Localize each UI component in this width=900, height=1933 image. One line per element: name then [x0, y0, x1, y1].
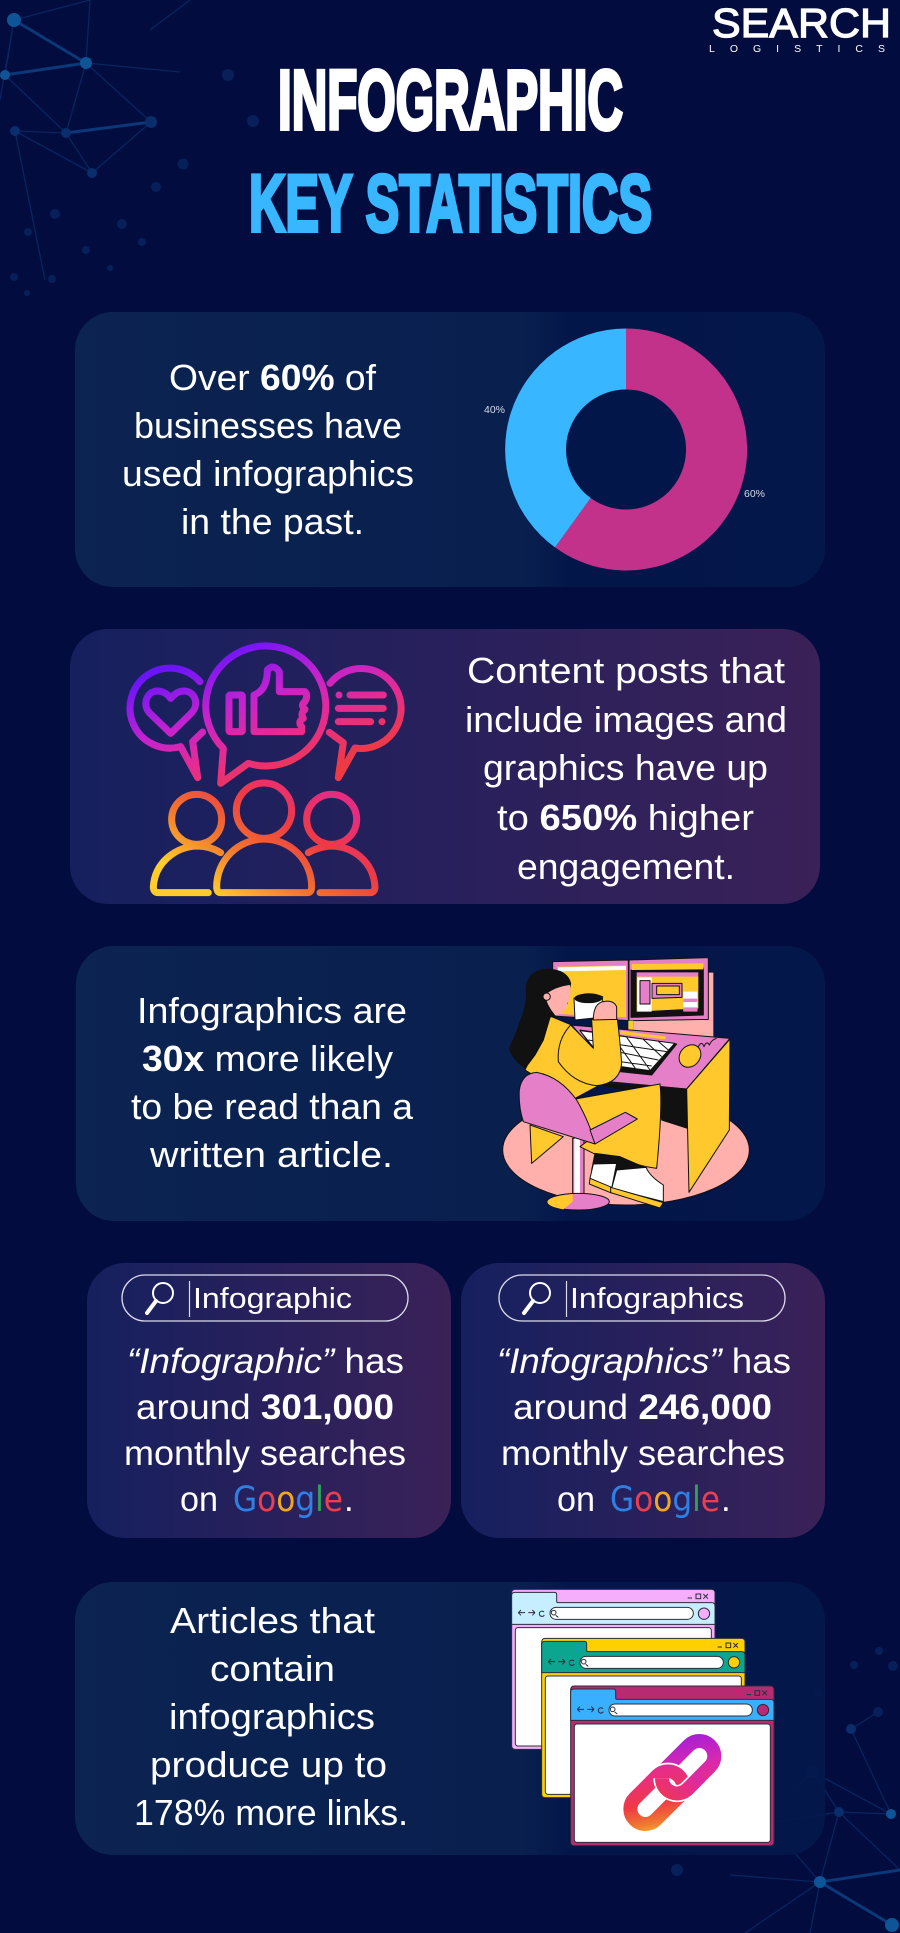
title: [249, 53, 652, 249]
icon: people with reaction speech bubbles: [130, 646, 401, 893]
stat text: over 60%: used infographics: [122, 453, 414, 494]
search bar: [499, 1275, 785, 1321]
stat text: Infographic searches: on: [180, 1480, 218, 1519]
stat text: links: Articles that: [170, 1600, 375, 1641]
stat text: 650% engagement: graphics have up: [483, 747, 768, 788]
browser window: pink: [512, 1589, 715, 1749]
search bar: [122, 1275, 408, 1321]
stat text: Infographics searches: Google: [610, 1480, 720, 1520]
stat text: Infographics searches: [497, 1342, 791, 1520]
panel: 60% of businesses: [75, 312, 825, 587]
title: INFOGRAPHIC: [278, 53, 623, 147]
stat text: links: [134, 1600, 408, 1833]
background network: bottom right: [671, 1647, 900, 1933]
stat text: over 60%: businesses have: [134, 405, 402, 446]
stat text: Infographic searches: around 301,000: [136, 1388, 394, 1427]
stat text: 30x: 30x more likely: [142, 1038, 393, 1079]
panel: 178% more links: [75, 1582, 825, 1855]
browser window: magenta and blue: [571, 1686, 774, 1846]
donut chart: [484, 328, 765, 570]
icon: magnifier: [524, 1283, 550, 1313]
stat text: links: contain: [210, 1648, 335, 1689]
title: KEY STATISTICS: [249, 159, 652, 249]
logo: SEARCH: [712, 0, 891, 46]
stat text: links: infographics: [169, 1696, 375, 1737]
panel: Infographics searches: [461, 1263, 825, 1538]
stat text: 650% engagement: Content posts that: [467, 650, 785, 691]
stat text: Infographic searches: [124, 1342, 406, 1520]
stat text: Infographic searches: “Infographic” has: [127, 1342, 404, 1381]
stat text: links: 178% more links.: [134, 1792, 408, 1833]
icon: chain link: [624, 1735, 721, 1830]
stat text: 650% engagement: to 650% higher: [497, 797, 754, 838]
panel: 30x more likely: [76, 946, 825, 1221]
stat text: 30x: [131, 990, 414, 1175]
stat text: 30x: written article.: [149, 1134, 393, 1175]
stat text: Infographics searches: on: [557, 1480, 595, 1519]
stat text: 650% engagement: [465, 650, 787, 887]
stat text: Infographic searches: .: [344, 1480, 354, 1519]
stat text: Infographics searches: .: [721, 1480, 731, 1519]
illustration: stacked browser windows with link: [512, 1589, 774, 1846]
stat text: Infographic searches: monthly searches: [124, 1434, 406, 1473]
icon: magnifier: [147, 1283, 173, 1313]
illustration: woman at desk: [503, 958, 749, 1210]
search bar: Infographics: [570, 1283, 744, 1315]
stat text: Infographics searches: around 246,000: [513, 1388, 772, 1427]
stat text: 30x: Infographics are: [137, 990, 407, 1031]
stat text: Infographics searches: “Infographics” has: [497, 1342, 791, 1381]
stat text: over 60%: [122, 357, 414, 542]
stat text: 650% engagement: include images and: [465, 699, 787, 740]
panel: Infographic searches: [87, 1263, 451, 1538]
stat text: Infographic searches: Google: [233, 1480, 343, 1520]
panel: 650% engagement: [70, 629, 820, 904]
stat text: Infographics searches: monthly searches: [501, 1434, 785, 1473]
search bar: Infographic: [193, 1283, 352, 1315]
donut chart: 40%: [484, 404, 505, 416]
stat text: over 60%: in the past.: [181, 501, 364, 542]
stat text: 30x: to be read than a: [131, 1086, 414, 1127]
donut chart: 60%: [744, 488, 765, 500]
browser window: yellow and teal: [542, 1638, 745, 1798]
stat text: 650% engagement: engagement.: [517, 846, 735, 887]
background network: top left: [0, 0, 259, 296]
stat text: links: produce up to: [150, 1744, 387, 1785]
stat text: over 60%: Over 60% of: [169, 357, 377, 398]
logo: LOGISTICS: [709, 43, 885, 55]
